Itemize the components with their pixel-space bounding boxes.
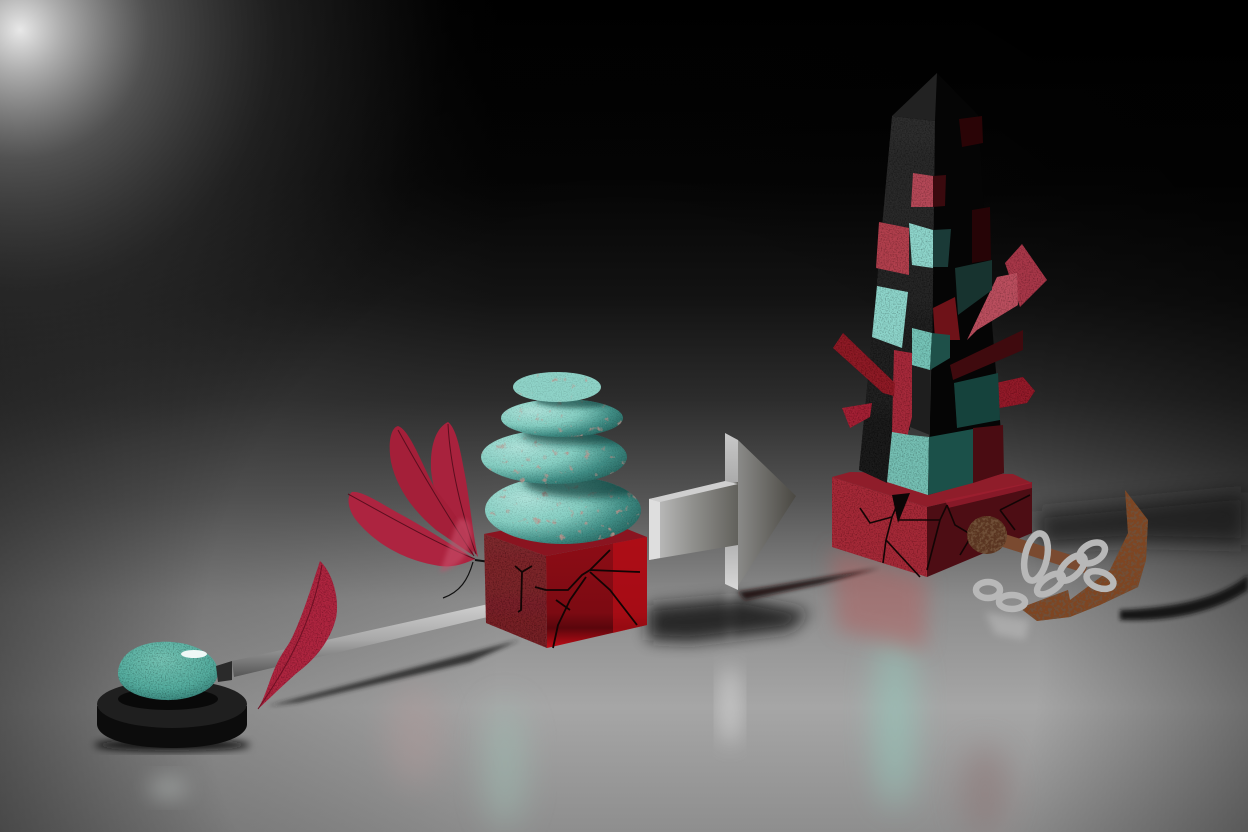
- anchor ring: [967, 516, 1007, 554]
- second stone: [501, 400, 623, 437]
- top stone: [513, 372, 601, 402]
- red fragments: [833, 173, 1047, 478]
- teal fragments in shadow: [928, 229, 1004, 495]
- obelisk lit left face: [859, 116, 935, 483]
- obelisk pyramid cap: [892, 73, 937, 121]
- lever rod: [216, 595, 532, 682]
- cracked red cube: [484, 525, 647, 648]
- obelisk black centre block: [910, 367, 930, 435]
- icon: single red feather: [258, 561, 337, 709]
- chain and anchor: [967, 490, 1148, 621]
- icon: teal pebble: [118, 642, 218, 700]
- obelisk dark right face: [928, 73, 1004, 495]
- floor reflections: [148, 548, 1030, 832]
- obelisk: [833, 73, 1047, 495]
- anchor shaft: [993, 537, 1087, 567]
- deep red shards in shadow: [933, 116, 1023, 380]
- cracks: [515, 550, 640, 648]
- stacked teal stones: [481, 372, 656, 544]
- anchor fluke: [1020, 490, 1148, 621]
- shadows on the floor: [94, 492, 1248, 751]
- black base with teal stone button: [97, 642, 247, 748]
- teal fragments: [872, 223, 933, 495]
- pebble highlight: [181, 650, 207, 658]
- bottom stone: [485, 479, 641, 544]
- third stone: [481, 432, 627, 484]
- chain links: [976, 531, 1116, 609]
- arrow: [649, 433, 796, 590]
- icon: feather trio: [348, 422, 522, 598]
- cracked red plinth: [832, 472, 1032, 577]
